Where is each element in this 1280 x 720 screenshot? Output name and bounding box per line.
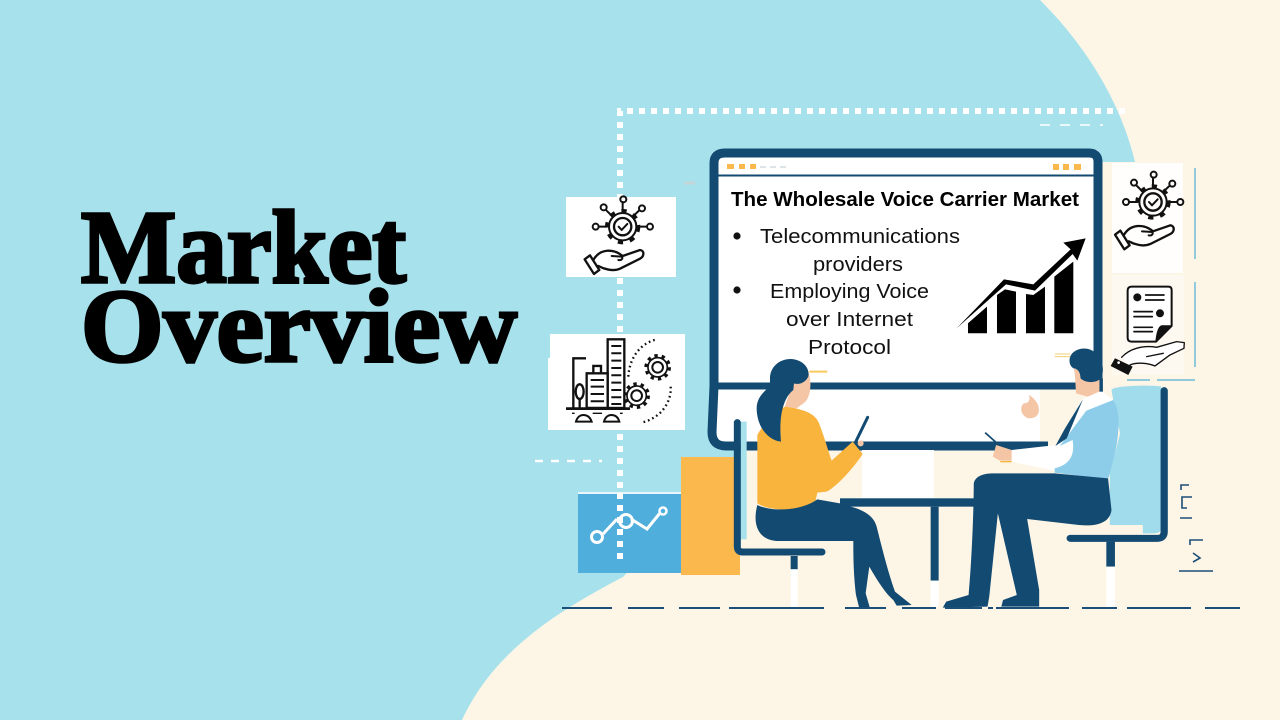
bullet list: over Internet xyxy=(786,309,913,331)
bullet list: providers xyxy=(813,254,903,276)
illustration: man and his chair xyxy=(943,349,1164,608)
blue chart tile xyxy=(578,493,681,573)
bullet list xyxy=(733,226,960,359)
table xyxy=(840,498,1000,607)
orange box xyxy=(681,457,740,575)
title xyxy=(81,190,517,384)
monitor heading: The Wholesale Voice Carrier Market xyxy=(731,189,1079,211)
icon: city with gears xyxy=(548,334,685,430)
small wall marks xyxy=(1179,485,1213,571)
title: Market xyxy=(81,190,406,305)
floor dashed line xyxy=(562,607,1240,609)
bullet list: Employing Voice xyxy=(770,281,929,303)
bullet list: Protocol xyxy=(808,337,891,359)
icon: document in hand xyxy=(1111,275,1184,375)
man's chair xyxy=(1070,386,1164,607)
icon: network gear and hand (left) xyxy=(566,196,676,277)
title: Overview xyxy=(81,269,517,384)
bullet list: Telecommunications xyxy=(760,226,960,248)
icon: network gear and hand (right) xyxy=(1112,163,1183,273)
right side panel lines xyxy=(1127,168,1195,380)
window dots xyxy=(727,164,1081,170)
growth chart icon xyxy=(957,238,1086,333)
woman xyxy=(756,359,912,608)
man xyxy=(943,349,1119,608)
monitor xyxy=(710,150,1098,498)
illustration: table and woman's chair xyxy=(737,359,1000,608)
woman's chair xyxy=(737,422,822,607)
dotted connector lines xyxy=(535,111,1125,560)
